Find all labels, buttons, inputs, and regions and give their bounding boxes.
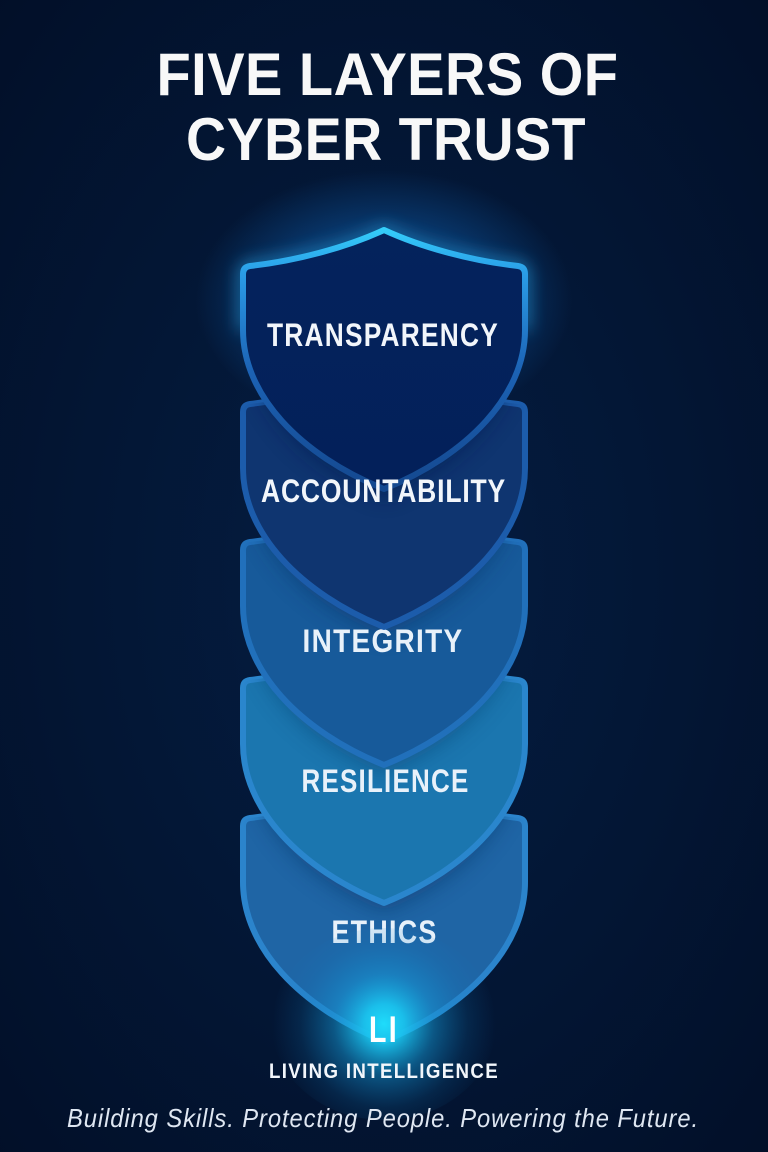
glow outline of transparency <box>243 230 525 330</box>
title: CYBER TRUST <box>186 106 586 173</box>
shadow on accountability <box>254 402 514 498</box>
label: ethics: ETHICS <box>332 914 438 950</box>
label: transparency: TRANSPARENCY <box>267 317 499 353</box>
label: accountability: ACCOUNTABILITY <box>261 473 506 509</box>
glow: living intelligence <box>272 928 496 1120</box>
logo: LI: LI <box>369 1009 399 1050</box>
label: resilience: RESILIENCE <box>302 763 470 799</box>
label: living intelligence: LIVING INTELLIGENCE <box>269 1060 499 1083</box>
shield: transparency <box>243 230 525 489</box>
shadow on resilience <box>256 678 512 777</box>
shadow on ethics <box>254 816 514 916</box>
shield: ethics <box>240 814 528 1044</box>
shield: resilience <box>240 676 528 906</box>
shield: accountability <box>240 400 528 630</box>
top glow <box>195 170 572 430</box>
title: FIVE LAYERS OF <box>156 41 618 108</box>
label: integrity: INTEGRITY <box>302 623 464 659</box>
tagline: Building Skills. Protecting People. Powering the Future. <box>67 1103 699 1133</box>
title <box>156 41 618 173</box>
shield stack <box>195 170 572 1041</box>
shadow on integrity <box>256 540 512 639</box>
shield: integrity <box>240 538 528 768</box>
